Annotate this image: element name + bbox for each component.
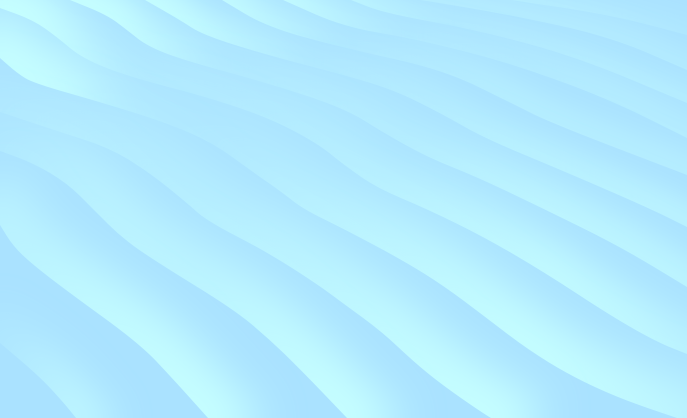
wave band 10	[0, 112, 491, 418]
wave band 11	[0, 151, 347, 418]
wave band 13	[0, 343, 76, 418]
wave band 12	[0, 225, 208, 418]
